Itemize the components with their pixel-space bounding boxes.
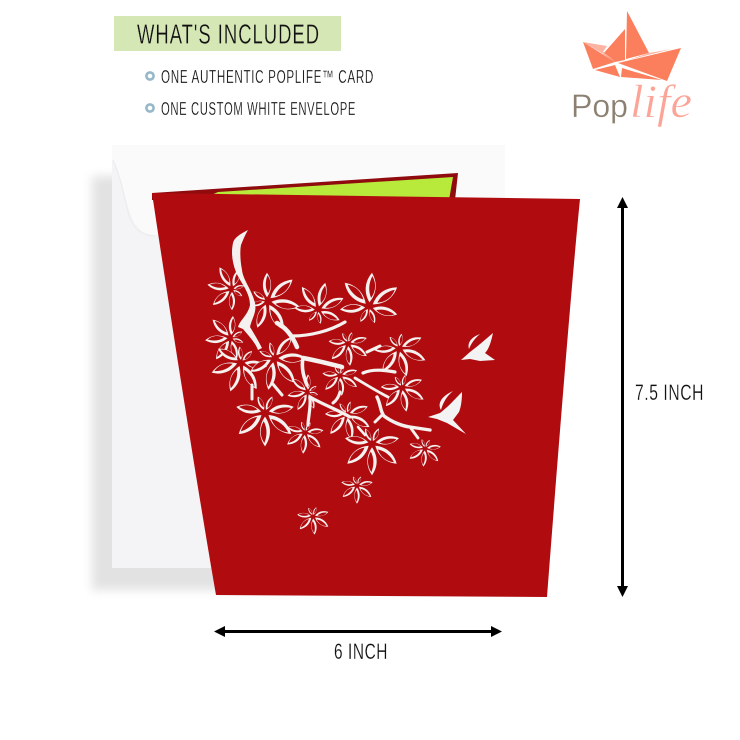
card: red front xyxy=(152,193,580,597)
heading: what's included: WHAT'S INCLUDED xyxy=(137,18,320,50)
branches xyxy=(252,322,430,438)
icon: lower bird xyxy=(428,391,466,434)
illustration: maple branch with leaves xyxy=(203,230,442,536)
list: included items: ONE AUTHENTIC POPLIFE™ CARD xyxy=(161,67,374,87)
list: included items xyxy=(146,67,374,119)
envelope shadow xyxy=(92,176,432,590)
icon: upper bird xyxy=(461,333,495,361)
logo: poplife paper boat xyxy=(571,11,692,128)
white envelope xyxy=(112,145,505,568)
arrow: height xyxy=(617,197,628,597)
trunk xyxy=(232,230,262,350)
logo: poplife paper boat: life xyxy=(630,76,692,128)
list: included items: ONE CUSTOM WHITE ENVELOPE xyxy=(161,99,356,119)
label: width: 6 INCH xyxy=(334,639,388,664)
leaves xyxy=(204,264,248,312)
label: height: 7.5 INCH xyxy=(635,380,704,405)
arrow: width xyxy=(214,626,502,637)
heading: what's included xyxy=(114,16,341,51)
card: back panel and green insert xyxy=(152,173,458,200)
logo: poplife paper boat: Pop xyxy=(571,88,628,124)
